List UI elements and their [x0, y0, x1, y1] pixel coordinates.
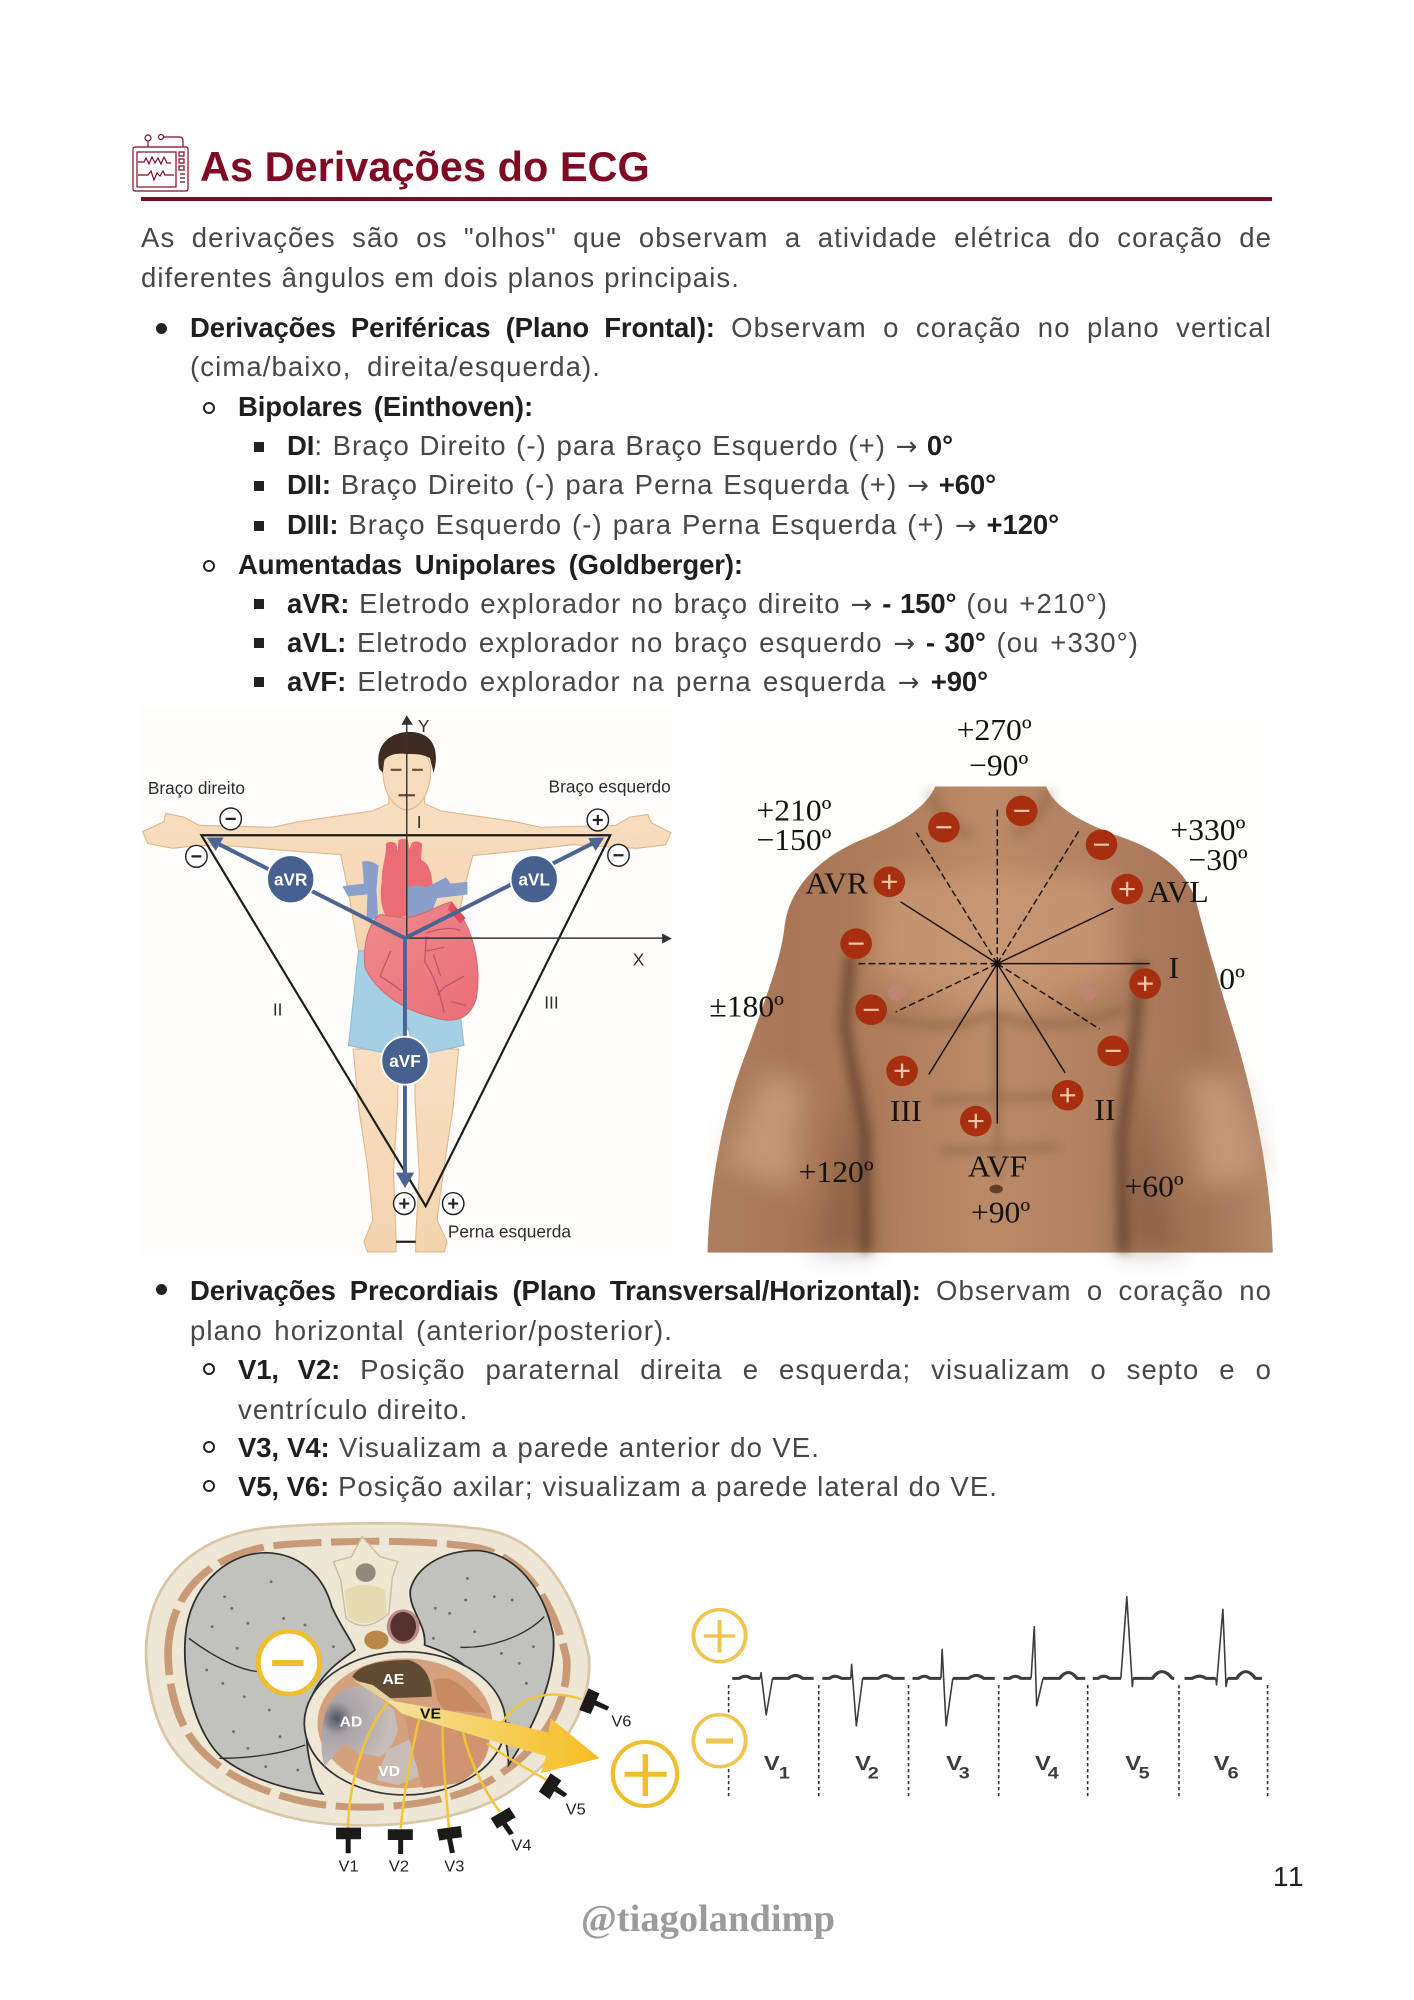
angle labels: +60º	[1124, 1169, 1184, 1203]
positive pole	[693, 1610, 746, 1662]
aVF: aVF: Eletrodo explorador na perna esquerda → +90°	[287, 666, 988, 698]
angle labels: −150º	[756, 822, 832, 857]
section: derivações periféricas line 2: (cima/baixo, direita/esquerda).	[190, 351, 601, 382]
angle labels: AVF	[968, 1149, 1027, 1183]
angle labels: II	[1094, 1092, 1115, 1127]
bullet	[254, 442, 264, 452]
V1 V2: V1, V2: Posição paraternal direita e esquerda; visualizam o septo e o	[238, 1354, 1272, 1385]
polarity markers	[186, 808, 629, 1214]
bullet	[203, 402, 215, 414]
chamber labels	[340, 1671, 441, 1780]
traces V1-V6	[732, 1597, 1262, 1726]
figure: human body	[142, 732, 671, 1252]
figure: vertebra	[334, 1537, 398, 1626]
footer handle: @tiagolandimp	[581, 1898, 835, 1940]
bullet	[156, 1284, 167, 1295]
section: derivações periféricas: Derivações Periféricas (Plano Frontal): Observam o coração no plano vertical	[190, 312, 1272, 343]
figure: esophagus	[364, 1631, 389, 1649]
bullet	[203, 1441, 215, 1453]
lead labels: V	[1214, 1752, 1230, 1775]
subheading: bipolares: Bipolares (Einthoven):	[238, 391, 533, 422]
figure: left lung	[410, 1551, 554, 1765]
chamber labels: VD	[378, 1763, 400, 1780]
V3 V4: V3, V4: Visualizam a parede anterior do VE.	[238, 1432, 820, 1463]
lead labels: V	[1125, 1752, 1141, 1775]
bullet	[254, 521, 264, 531]
bullet	[254, 599, 264, 609]
angle labels: AVR	[805, 866, 868, 900]
bullet	[203, 1363, 215, 1375]
angle labels: +330º	[1170, 812, 1246, 847]
labels: Braço esquerdo	[549, 777, 671, 797]
icon: ECG monitor	[132, 134, 189, 192]
badge aVR	[267, 855, 314, 903]
angle labels	[709, 712, 1248, 1229]
figure: heart	[342, 839, 478, 1020]
electrode labels: V6	[611, 1714, 632, 1731]
nipples	[888, 985, 1097, 1001]
bullet	[203, 1480, 215, 1492]
labels: III	[544, 992, 559, 1012]
panel: Einthoven triangle on body	[141, 707, 673, 1256]
figure: body outline	[146, 1523, 589, 1825]
electrode labels: V4	[511, 1838, 532, 1854]
vectors aVR aVL aVF	[207, 837, 604, 1188]
hexaxial lines	[855, 809, 1150, 1124]
badge aVF	[381, 1037, 429, 1085]
electrodes	[840, 796, 1161, 1136]
lead labels: V	[946, 1752, 962, 1775]
hair	[378, 732, 436, 773]
panel: chest photo with hexaxial leads	[708, 707, 1274, 1253]
lead labels: 1	[779, 1763, 790, 1782]
shorts	[349, 951, 464, 1056]
angle labels: +270º	[957, 712, 1032, 747]
page number: 11	[1273, 1861, 1305, 1892]
negative pole	[258, 1631, 320, 1694]
angle labels: I	[1168, 951, 1179, 985]
lead labels: 4	[1048, 1763, 1060, 1782]
labels: X	[633, 949, 645, 969]
navel	[989, 1185, 1003, 1193]
chamber labels: AE	[382, 1671, 404, 1688]
labels: II	[273, 999, 282, 1020]
intro text line 2: diferentes ângulos em dois planos principais.	[141, 262, 740, 293]
aVL: aVL: Eletrodo explorador no braço esquerdo → - 30° (ou +330°)	[287, 627, 1139, 659]
positive pole	[613, 1742, 677, 1806]
labels: Perna esquerda	[448, 1221, 571, 1241]
section: derivações precordiais: Derivações Precordiais (Plano Transversal/Horizontal): Observam o coração no	[190, 1275, 1272, 1306]
face	[391, 770, 423, 795]
axis X	[407, 933, 672, 944]
electrode labels	[339, 1714, 632, 1875]
electrode labels: V2	[389, 1859, 409, 1875]
negative pole	[693, 1715, 746, 1767]
labels	[148, 716, 671, 1241]
labels: I	[417, 812, 422, 832]
figure: right lung	[185, 1553, 355, 1794]
lead labels: 5	[1139, 1763, 1150, 1782]
labels: Braço direito	[148, 778, 245, 798]
intro text: As derivações são os "olhos" que observam a atividade elétrica do coração de	[141, 222, 1272, 253]
angle labels: +90º	[971, 1195, 1031, 1229]
V1 V2 line 2: ventrículo direito.	[238, 1394, 468, 1425]
bullet	[254, 481, 264, 491]
electrode labels: V1	[339, 1859, 359, 1875]
aVR: aVR: Eletrodo explorador no braço direito → - 150° (ou +210°)	[287, 588, 1108, 620]
lead labels: V	[855, 1752, 871, 1775]
badge aVL: aVL	[519, 869, 550, 889]
axis Y	[401, 715, 413, 938]
DII: DII: Braço Direito (-) para Perna Esquerda (+) → +60°	[287, 469, 996, 501]
chamber labels: VE	[420, 1706, 441, 1722]
DI: DI: Braço Direito (-) para Braço Esquerdo (+) → 0°	[287, 430, 953, 462]
subheading: aumentadas: Aumentadas Unipolares (Goldberger):	[238, 549, 743, 580]
angle labels: ±180º	[709, 989, 784, 1023]
angle labels: III	[890, 1094, 922, 1128]
lead labels: 2	[868, 1763, 879, 1782]
angle labels: AVL	[1148, 874, 1209, 909]
lung fissures and speckle	[189, 1578, 544, 1770]
lead labels: V	[764, 1752, 780, 1775]
electrodes	[336, 1688, 609, 1854]
electrode leads	[348, 1695, 582, 1828]
section: derivações precordiais line 2: plano horizontal (anterior/posterior).	[190, 1315, 673, 1346]
panel: thorax cross-section	[146, 1523, 677, 1875]
electrode labels: V5	[566, 1802, 586, 1818]
angle labels: −30º	[1188, 843, 1248, 877]
angle labels: +120º	[799, 1154, 874, 1189]
angle labels: −90º	[969, 748, 1029, 783]
bullet	[254, 677, 264, 687]
badge aVL	[511, 855, 558, 903]
lead labels: 6	[1228, 1763, 1239, 1782]
chamber labels: AD	[340, 1714, 362, 1731]
V5 V6: V5, V6: Posição axilar; visualizam a parede lateral do VE.	[238, 1471, 998, 1502]
angle labels: +210º	[756, 793, 832, 828]
badge aVF: aVF	[389, 1051, 421, 1071]
labels: Y	[418, 716, 430, 736]
vector arrow	[387, 1700, 600, 1773]
badge aVR: aVR	[274, 869, 308, 889]
triangle: leads I II III	[201, 835, 610, 1206]
bullet	[156, 323, 167, 334]
angle labels: 0º	[1219, 962, 1245, 996]
lead labels: 3	[959, 1763, 970, 1782]
lead labels	[764, 1752, 1239, 1782]
figure: torso	[708, 787, 1273, 1253]
panel: precordial ECG traces	[693, 1597, 1268, 1798]
electrode labels: V3	[444, 1859, 464, 1875]
bullet	[203, 560, 215, 572]
title: As Derivações do ECG	[200, 143, 650, 190]
bullet	[254, 638, 264, 648]
DIII: DIII: Braço Esquerdo (-) para Perna Esquerda (+) → +120°	[287, 509, 1059, 541]
figure: aorta	[387, 1609, 420, 1644]
figure: pericardium and heart	[304, 1652, 506, 1795]
lead labels: V	[1035, 1752, 1051, 1775]
